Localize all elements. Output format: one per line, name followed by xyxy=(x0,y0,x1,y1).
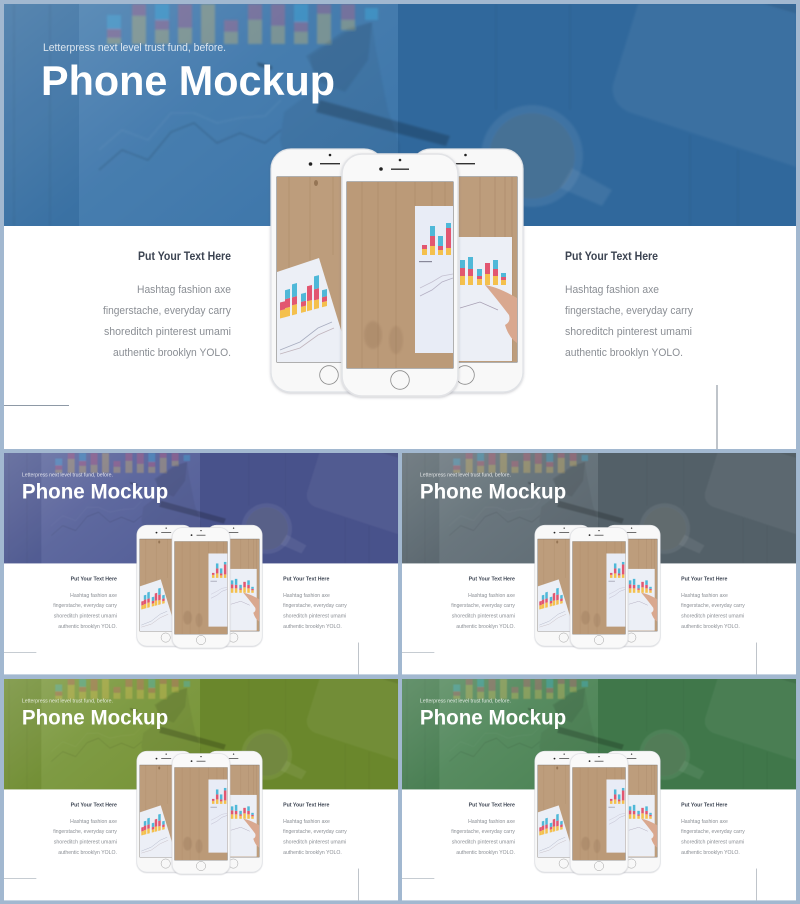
right text block: authentic brooklyn YOLO. xyxy=(681,624,740,630)
right text block: fingerstache, everyday carry xyxy=(283,603,347,609)
phone mockups xyxy=(271,149,523,396)
header photo: grey tint xyxy=(402,453,796,563)
left text block: Put Your Text Here xyxy=(71,802,117,808)
white content area with corner lines xyxy=(4,563,398,674)
right text block xyxy=(283,576,347,630)
subtitle: Letterpress next level trust fund, before. xyxy=(420,698,511,704)
left text block: Put Your Text Here xyxy=(469,802,515,808)
subtitle: Letterpress next level trust fund, before. xyxy=(420,472,511,478)
header photo: green tint xyxy=(402,679,796,789)
right text block: shoreditch pinterest umami xyxy=(681,614,744,620)
white content area with corner lines xyxy=(402,789,796,900)
left text block: authentic brooklyn YOLO. xyxy=(456,850,515,856)
right text block: shoreditch pinterest umami xyxy=(283,614,346,620)
phone mockups xyxy=(535,751,660,874)
left text block: Hashtag fashion axe xyxy=(468,819,515,825)
left text block: shoreditch pinterest umami xyxy=(452,840,515,846)
title: Phone Mockup xyxy=(22,480,168,503)
left text block: authentic brooklyn YOLO. xyxy=(456,624,515,630)
title: Phone Mockup xyxy=(420,480,566,503)
right text block: shoreditch pinterest umami xyxy=(681,840,744,846)
panel: main blue slide xyxy=(4,4,796,449)
right text block: Put Your Text Here xyxy=(681,802,727,808)
left text block: fingerstache, everyday carry xyxy=(451,603,515,609)
right text block: fingerstache, everyday carry xyxy=(681,829,745,835)
left text block xyxy=(103,251,231,359)
panel: grey slide xyxy=(402,453,796,674)
right text block: authentic brooklyn YOLO. xyxy=(283,850,342,856)
white content area with corner lines xyxy=(4,789,398,900)
white content area with corner lines xyxy=(402,563,796,674)
right text block: Put Your Text Here xyxy=(283,576,329,582)
left text block: Hashtag fashion axe xyxy=(137,284,231,296)
left text block: shoreditch pinterest umami xyxy=(104,326,231,338)
right text block: Hashtag fashion axe xyxy=(283,819,330,825)
left text block: Put Your Text Here xyxy=(71,576,117,582)
subtitle: Letterpress next level trust fund, before. xyxy=(22,698,113,704)
right text block xyxy=(565,251,693,359)
left text block: Put Your Text Here xyxy=(138,251,231,263)
subtitle: Letterpress next level trust fund, before. xyxy=(43,42,226,54)
left text block: authentic brooklyn YOLO. xyxy=(58,624,117,630)
left text block: shoreditch pinterest umami xyxy=(54,840,117,846)
panel: green slide xyxy=(402,679,796,900)
right text block: shoreditch pinterest umami xyxy=(283,840,346,846)
right text block: authentic brooklyn YOLO. xyxy=(681,850,740,856)
right text block: shoreditch pinterest umami xyxy=(565,326,692,338)
right text block: authentic brooklyn YOLO. xyxy=(565,347,683,359)
right text block: Put Your Text Here xyxy=(283,802,329,808)
left text block: Hashtag fashion axe xyxy=(70,819,117,825)
right text block: Put Your Text Here xyxy=(681,576,727,582)
left text block: fingerstache, everyday carry xyxy=(451,829,515,835)
title: Phone Mockup xyxy=(22,706,168,729)
left text block: Hashtag fashion axe xyxy=(468,593,515,599)
phone mockups xyxy=(137,751,262,874)
phone mockups xyxy=(137,525,262,648)
right text block: Put Your Text Here xyxy=(565,251,658,263)
right text block: Hashtag fashion axe xyxy=(681,819,728,825)
left text block xyxy=(451,802,515,856)
left text block: shoreditch pinterest umami xyxy=(54,614,117,620)
left text block xyxy=(53,576,117,630)
left text block: shoreditch pinterest umami xyxy=(452,614,515,620)
right text block: Hashtag fashion axe xyxy=(681,593,728,599)
left text block: Put Your Text Here xyxy=(469,576,515,582)
left text block: fingerstache, everyday carry xyxy=(53,829,117,835)
right text block: fingerstache, everyday carry xyxy=(283,829,347,835)
right text block xyxy=(283,802,347,856)
left text block xyxy=(53,802,117,856)
left text block xyxy=(451,576,515,630)
right text block: fingerstache, everyday carry xyxy=(681,603,745,609)
right text block xyxy=(681,802,745,856)
title: Phone Mockup xyxy=(420,706,566,729)
header photo: purple tint xyxy=(4,453,398,563)
left text block: authentic brooklyn YOLO. xyxy=(113,347,231,359)
right text block: Hashtag fashion axe xyxy=(283,593,330,599)
right text block: authentic brooklyn YOLO. xyxy=(283,624,342,630)
panel: olive slide xyxy=(4,679,398,900)
title: Phone Mockup xyxy=(41,57,335,104)
left text block: fingerstache, everyday carry xyxy=(103,305,231,317)
subtitle: Letterpress next level trust fund, before. xyxy=(22,472,113,478)
right text block: Hashtag fashion axe xyxy=(565,284,659,296)
left text block: authentic brooklyn YOLO. xyxy=(58,850,117,856)
phone mockups xyxy=(535,525,660,648)
white content area with corner lines xyxy=(4,226,796,449)
left text block: Hashtag fashion axe xyxy=(70,593,117,599)
header photo: blue tint xyxy=(4,4,796,226)
panel: purple slide xyxy=(4,453,398,674)
left text block: fingerstache, everyday carry xyxy=(53,603,117,609)
header photo: olive tint xyxy=(4,679,398,789)
right text block: fingerstache, everyday carry xyxy=(565,305,693,317)
right text block xyxy=(681,576,745,630)
